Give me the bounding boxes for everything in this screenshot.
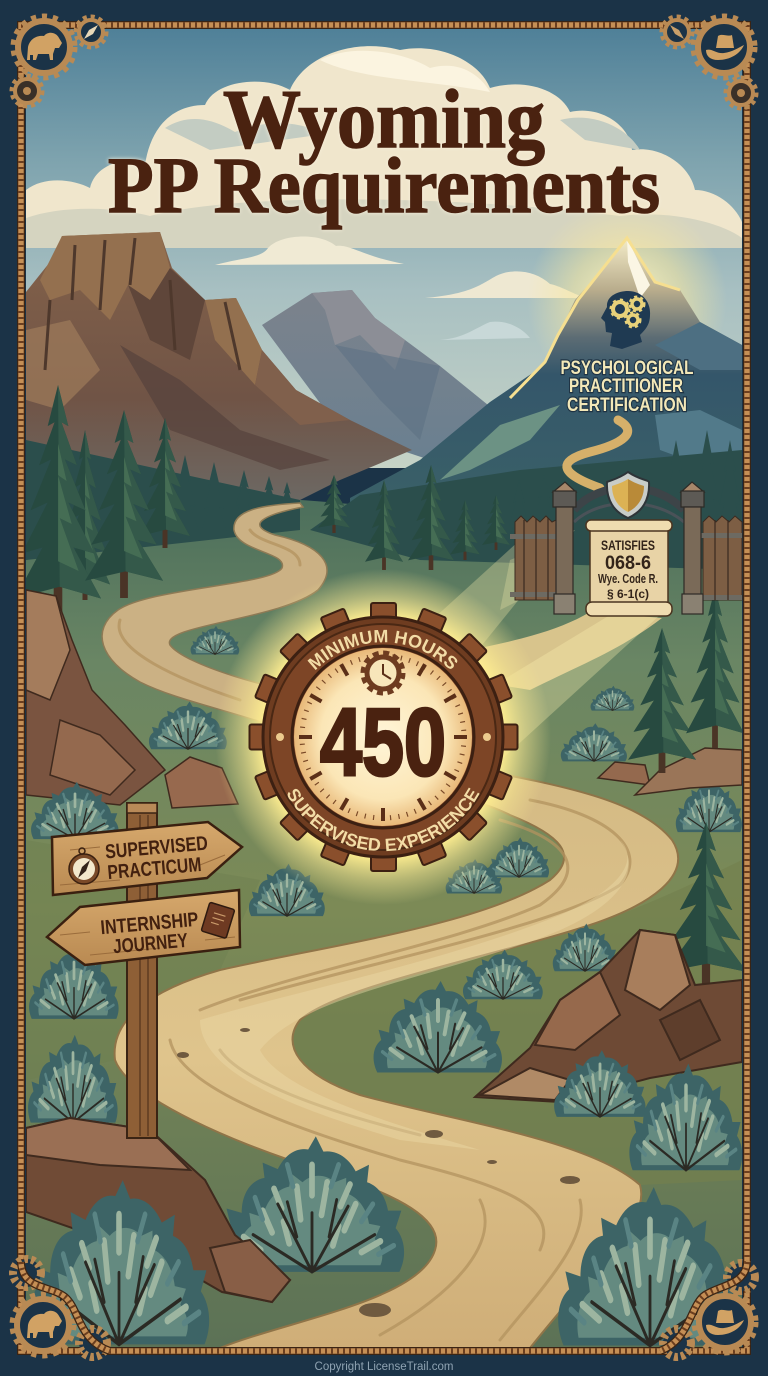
left mesa mountain xyxy=(26,232,412,510)
scroll text: 068-6 xyxy=(605,553,651,574)
icon: head with gears xyxy=(601,291,650,349)
fence right xyxy=(700,516,742,600)
post xyxy=(127,803,157,1138)
gate and fence xyxy=(510,472,742,616)
upper road xyxy=(101,502,328,721)
corner: bottom left gears and rope xyxy=(13,1259,110,1357)
trail to summit xyxy=(567,420,628,488)
title line 2: PP Requirements xyxy=(108,143,660,230)
large right rocks xyxy=(475,930,742,1102)
light beams xyxy=(439,530,658,752)
pine trees right xyxy=(628,588,747,987)
shield xyxy=(607,472,649,518)
centre distant mountain xyxy=(262,290,488,460)
small gear wheel xyxy=(726,78,756,108)
icon: book xyxy=(201,902,235,938)
big gear hat xyxy=(694,17,754,77)
title line 1: Wyoming xyxy=(223,73,545,166)
sign: internship journey xyxy=(47,890,240,965)
small cloud centre xyxy=(215,236,404,265)
gate post left xyxy=(553,482,576,614)
big gear hat xyxy=(695,1292,755,1352)
small cloud low xyxy=(440,322,530,340)
arc label top: MINIMUM HOURS xyxy=(308,630,458,670)
hub dots xyxy=(276,733,284,741)
scroll text: § 6-1(c) xyxy=(607,587,649,601)
hours value: 450 xyxy=(320,689,446,796)
gear teeth xyxy=(250,603,518,871)
right mountain with certification peak xyxy=(350,236,742,502)
corner: top right gears xyxy=(662,17,756,108)
certification label: PRACTITIONER xyxy=(569,376,683,397)
road ruts xyxy=(119,530,630,1340)
road pebbles xyxy=(177,1028,580,1317)
road light patch xyxy=(200,840,629,1150)
certification label: PSYCHOLOGICAL xyxy=(560,358,694,379)
hour ticks xyxy=(299,663,467,821)
signpost xyxy=(47,803,242,1138)
distant forest xyxy=(26,430,745,570)
copyright: Copyright LicenseTrail.com xyxy=(315,1361,453,1373)
big gear bison xyxy=(13,1295,73,1355)
bottom left rock xyxy=(26,1118,290,1302)
icon: compass xyxy=(69,848,99,884)
icon: small clock gear xyxy=(363,653,403,693)
certification label: CERTIFICATION xyxy=(567,395,687,416)
left meadow xyxy=(26,840,260,1080)
small gear leaf xyxy=(662,17,692,47)
sign: internship journey: JOURNEY xyxy=(112,930,189,958)
shrubs foreground xyxy=(28,981,742,1272)
corner: bottom right gears and rope xyxy=(660,1262,755,1357)
minimum hours gear badge xyxy=(248,602,518,872)
title xyxy=(108,73,660,230)
fence left xyxy=(510,516,560,600)
small gear wheel xyxy=(12,76,42,106)
small cloud right xyxy=(425,271,585,298)
clock face xyxy=(294,648,472,826)
sign: internship journey: INTERNSHIP xyxy=(100,909,199,939)
scroll xyxy=(586,520,672,616)
small gear compass xyxy=(76,17,106,47)
corner: top left gears xyxy=(12,17,106,106)
shrubs middle xyxy=(29,626,742,1019)
gate post right xyxy=(681,482,704,614)
scroll text xyxy=(598,538,658,601)
badge glow xyxy=(215,569,551,905)
grass island xyxy=(292,860,742,1185)
rope loop xyxy=(21,1262,110,1351)
sign: supervised practicum: PRACTICUM xyxy=(107,854,202,884)
pine trees centre xyxy=(318,465,510,570)
peak sky glow xyxy=(536,219,718,347)
ground xyxy=(26,470,742,1348)
right rocks near gear xyxy=(598,748,742,795)
sign: supervised practicum: SUPERVISED xyxy=(104,833,209,863)
road to gate xyxy=(470,612,662,690)
left rock outcrop xyxy=(26,590,238,808)
big gear bison xyxy=(14,17,74,77)
foreground shrubs corners xyxy=(28,1180,741,1345)
pine trees left xyxy=(15,385,190,620)
wooden ring xyxy=(263,617,503,857)
certification label xyxy=(560,358,694,416)
title clouds xyxy=(26,46,742,248)
main road xyxy=(115,768,678,1348)
sky xyxy=(26,28,742,468)
sign: supervised practicum xyxy=(52,822,242,895)
rope loop xyxy=(660,1262,747,1351)
scroll text: Wye. Code R. xyxy=(598,572,658,586)
arc label bottom: SUPERVISED EXPERIENCE xyxy=(288,788,480,852)
gate arch xyxy=(574,488,684,510)
scroll text: SATISFIES xyxy=(601,538,655,553)
